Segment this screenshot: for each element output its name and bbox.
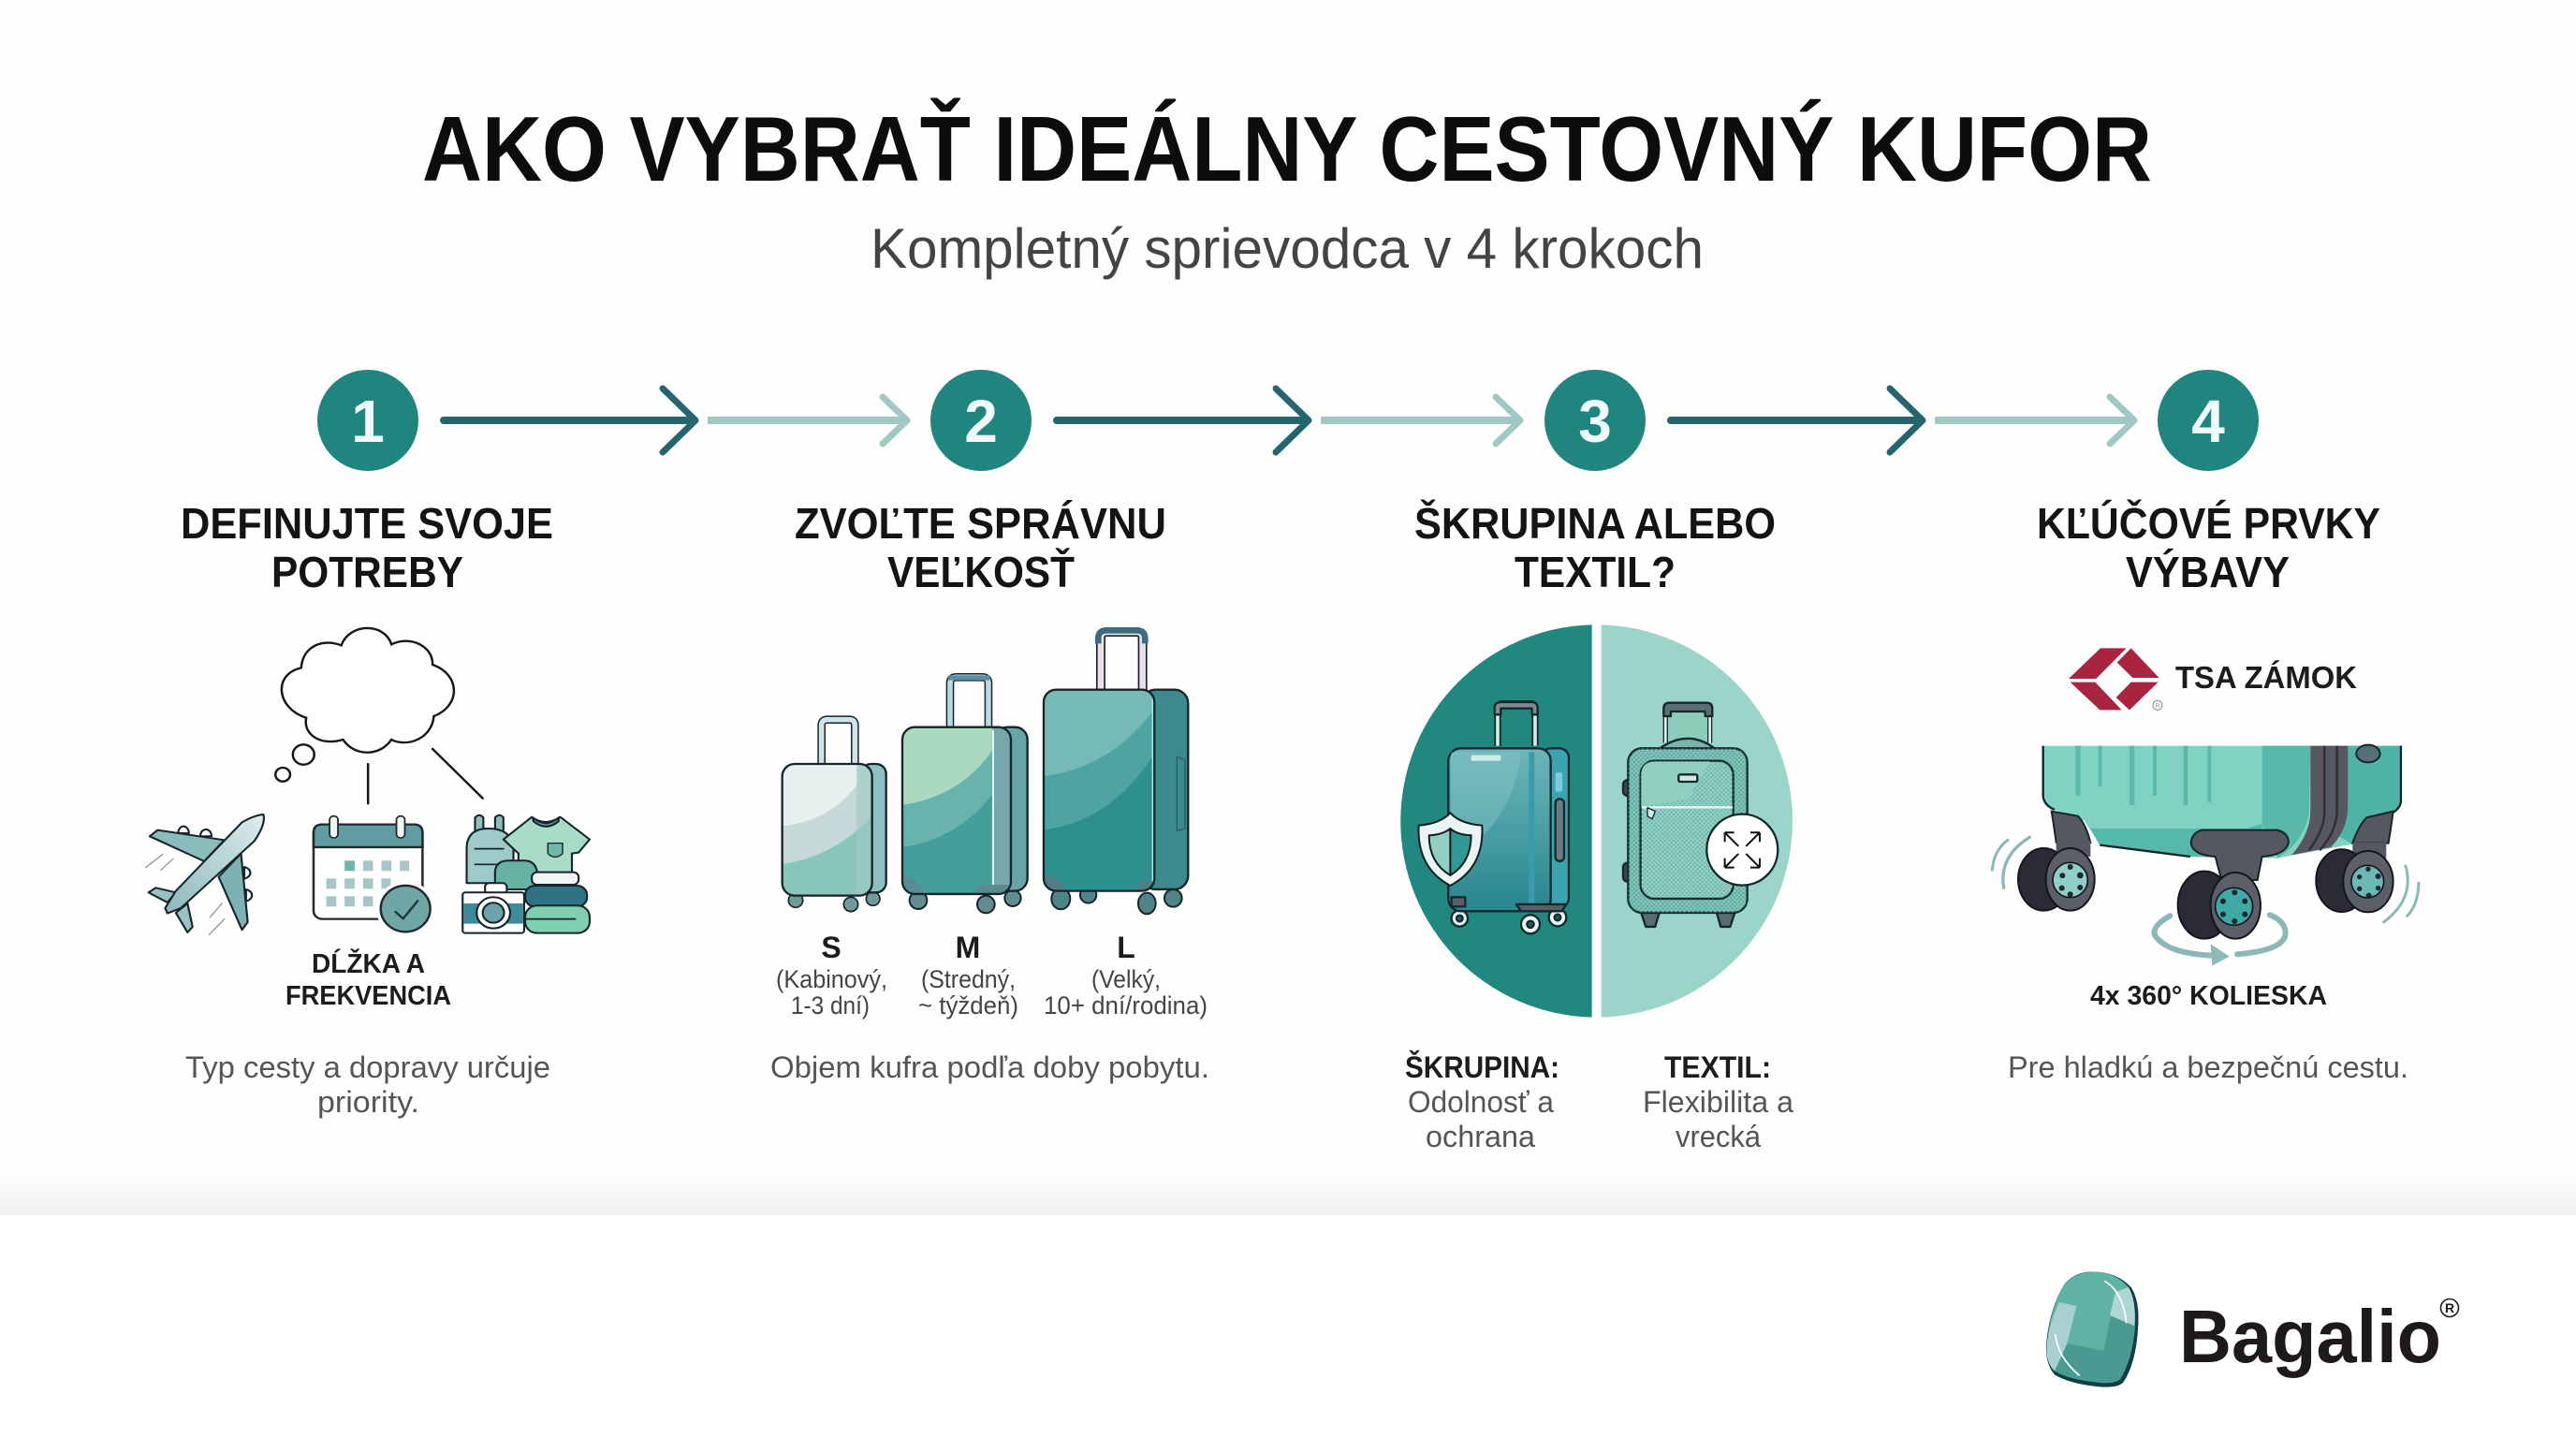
- illustration: thought cloud with travel icons: [146, 628, 590, 936]
- icon: small suitcase: [780, 720, 886, 912]
- label: size S: (Kabinový,: [776, 965, 887, 993]
- heading: step 3: ŠKRUPINA ALEBO: [1414, 499, 1776, 548]
- wordmark: Bagalio: [2179, 1295, 2441, 1378]
- icon: luggage items: [462, 815, 590, 933]
- label: hard shell: ochrana: [1426, 1120, 1535, 1153]
- step number 2: 2: [964, 388, 998, 455]
- label: hard shell: [1405, 1050, 1559, 1153]
- label: size M: (Stredný,: [921, 965, 1016, 993]
- description: step 1: [185, 1050, 550, 1119]
- step number 2: [930, 370, 1032, 471]
- label: size L: [1044, 931, 1208, 1020]
- heading: step 4: KĽÚČOVÉ PRVKY: [2037, 499, 2380, 548]
- label: textile: [1643, 1050, 1793, 1153]
- label: size L: (Velký,: [1091, 965, 1161, 993]
- arrow 1 to 2: [444, 389, 907, 452]
- label: spinner wheels: 4x 360° KOLIESKA: [2090, 981, 2327, 1011]
- label: textile: Flexibilita a: [1643, 1085, 1793, 1119]
- heading: step 4: [2037, 499, 2380, 596]
- label: size L: 10+ dní/rodina): [1044, 991, 1208, 1020]
- icon: large suitcase: [1042, 630, 1188, 914]
- heading: step 2: VEĽKOSŤ: [887, 548, 1075, 596]
- icon: calendar with check: [314, 816, 435, 936]
- registered mark: [2441, 1299, 2458, 1316]
- heading: step 1: POTREBY: [271, 548, 463, 596]
- step progress row: [317, 370, 2259, 471]
- label: size M: [918, 931, 1018, 1020]
- icon: TSA lock logo: R: [2156, 703, 2160, 710]
- panel: step 3 shell or textile: [1400, 499, 1793, 1153]
- label: size L: L: [1117, 931, 1135, 964]
- arrow 3 to 4: [1671, 389, 2134, 452]
- title: AKO VYBRAŤ IDEÁLNY CESTOVNÝ KUFOR: [422, 97, 2152, 200]
- step number 3: [1544, 370, 1646, 471]
- panel: step 4 key features: [1992, 499, 2419, 1084]
- arrow 2 to 3: [1057, 389, 1520, 452]
- description: step 1: Typ cesty a dopravy určuje: [185, 1050, 550, 1084]
- step number 1: [317, 370, 418, 471]
- icon: gem mark: [2046, 1271, 2139, 1387]
- description: step 2: Objem kufra podľa doby pobytu.: [770, 1050, 1209, 1084]
- icon: motion lines and rotation arrow: [1992, 837, 2419, 966]
- suitcase lower body: [2043, 745, 2401, 880]
- icon: thought cloud: [275, 628, 483, 803]
- label: length and frequency: DĹŽKA A: [312, 947, 425, 979]
- heading: step 2: [795, 499, 1166, 596]
- label: length and frequency: [285, 947, 451, 1011]
- illustration: suitcase base with spinner wheels: [1992, 745, 2419, 966]
- label: hard shell: ŠKRUPINA:: [1405, 1050, 1559, 1084]
- heading: step 3: [1414, 499, 1776, 596]
- heading: step 1: DEFINUJTE SVOJE: [181, 499, 553, 548]
- heading: step 3: TEXTIL?: [1515, 548, 1676, 596]
- label: textile: TEXTIL:: [1664, 1050, 1771, 1084]
- illustration: three suitcases: [780, 630, 1188, 914]
- label: size S: [776, 931, 887, 1020]
- step number 4: [2158, 370, 2259, 471]
- registered mark: R: [2445, 1300, 2454, 1315]
- label: hard shell: Odolnosť a: [1408, 1085, 1554, 1119]
- heading: step 1: [181, 499, 553, 596]
- label: TSA lock: TSA ZÁMOK: [2175, 660, 2357, 695]
- half circle: textile: [1602, 624, 1793, 1018]
- panel: step 2 size: [770, 499, 1209, 1084]
- icon: center wheel: [2178, 872, 2261, 939]
- step number 3: 3: [1578, 388, 1612, 455]
- icon: medium suitcase: [901, 677, 1028, 913]
- icon: expand badge: [1706, 814, 1778, 886]
- label: size S: 1-3 dní): [791, 991, 870, 1020]
- heading: step 4: VÝBAVY: [2126, 548, 2290, 596]
- label: size M: M: [956, 931, 980, 964]
- label: length and frequency: FREKVENCIA: [285, 981, 451, 1011]
- icon: shield: [1419, 813, 1483, 886]
- brand logo: [2046, 1271, 2458, 1387]
- half circle: hard shell: [1400, 624, 1592, 1018]
- label: size S: S: [821, 931, 842, 964]
- step number 4: 4: [2191, 388, 2225, 455]
- label: textile: vrecká: [1676, 1120, 1761, 1153]
- footer band: [0, 1170, 2576, 1438]
- icon: hard shell suitcase: [1448, 702, 1569, 933]
- icon: textile suitcase: [1623, 703, 1748, 927]
- panel: step 1 needs: [146, 499, 590, 1119]
- icon: right wheel: [2316, 849, 2393, 912]
- icon: left wheel: [2018, 848, 2095, 911]
- illustration: split circle comparison: [1400, 624, 1793, 1018]
- subtitle: Kompletný sprievodca v 4 krokoch: [871, 217, 1704, 280]
- step number 1: 1: [351, 388, 385, 455]
- description: step 1: priority.: [317, 1085, 419, 1119]
- icon: TSA lock logo: [2069, 648, 2162, 710]
- heading: step 2: ZVOĽTE SPRÁVNU: [795, 499, 1166, 548]
- icon: airplane: [146, 814, 264, 934]
- description: step 4: Pre hladkú a bezpečnú cestu.: [2008, 1050, 2408, 1084]
- label: size M: ~ týždeň): [918, 991, 1018, 1020]
